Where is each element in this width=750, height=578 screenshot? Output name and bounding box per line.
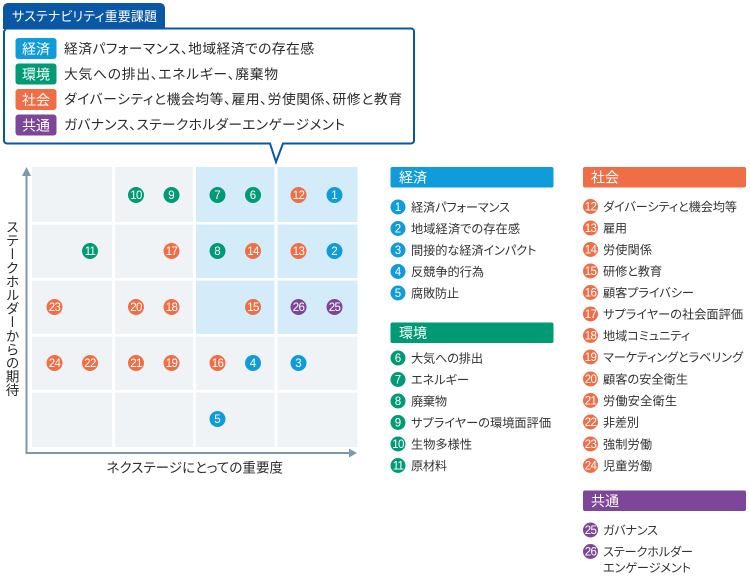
- row: economy: [16, 38, 314, 59]
- legend: society: 顧客プライバシー: [603, 286, 694, 300]
- legend: common: ステークホルダー: [603, 544, 693, 559]
- legend: common: エンゲージメント: [603, 561, 691, 575]
- matrix markers: 15: [247, 302, 259, 314]
- matrix markers: 8: [214, 246, 221, 258]
- heading tab: [3, 3, 165, 29]
- legend: common: [583, 490, 746, 575]
- legend: environment: 原材料: [411, 459, 447, 473]
- legend: society: 21: [585, 396, 596, 408]
- legend: environment: 廃棄物: [411, 394, 447, 408]
- legend: common: 共通: [591, 493, 619, 509]
- matrix markers: 1: [331, 190, 338, 202]
- legend: society: サプライヤーの社会面評価: [603, 306, 743, 322]
- matrix markers: 12: [293, 190, 304, 202]
- panel: sustainability key issues callout: [3, 3, 414, 162]
- legend: society: 19: [585, 352, 596, 364]
- matrix markers: 4: [250, 358, 257, 370]
- row: environment: [16, 64, 278, 84]
- row: society: ダイバーシティと機会均等、雇用、労使関係、研修と教育: [64, 91, 402, 107]
- legend: environment: 環境: [399, 325, 427, 341]
- legend: environment: 大気への排出: [411, 350, 483, 366]
- legend: common: ガバナンス: [603, 524, 658, 538]
- legend: society: マーケティングとラベリング: [603, 350, 744, 364]
- legend: environment: 9: [395, 418, 401, 430]
- legend: society: 23: [585, 439, 596, 451]
- x-axis label: ネクステージにとっての重要度: [106, 460, 283, 476]
- legend: environment: サプライヤーの環境面評価: [411, 416, 551, 430]
- materiality matrix chart: [4, 167, 358, 476]
- callout frame with pointer: [4, 28, 414, 162]
- legend: economy: 経済パフォーマンス: [411, 200, 510, 214]
- matrix markers: 22: [84, 358, 96, 370]
- matrix markers: 18: [166, 302, 177, 314]
- legend: environment: エネルギー: [411, 373, 469, 387]
- legend: society: 社会: [591, 170, 619, 186]
- legend: economy: 2: [395, 224, 401, 236]
- matrix markers: 24: [49, 358, 61, 370]
- matrix markers: 10: [130, 190, 142, 202]
- row: common: 共通: [22, 118, 50, 134]
- matrix markers: 19: [166, 358, 177, 370]
- legend: environment: 10: [392, 439, 404, 451]
- legend: society: 労働安全衛生: [603, 394, 677, 408]
- legend: economy: 間接的な経済インパクト: [411, 242, 536, 258]
- legend: society: 労使関係: [603, 242, 652, 257]
- legend: society: 22: [585, 417, 596, 429]
- legend: society: 15: [585, 266, 596, 278]
- legend: environment: 生物多様性: [411, 438, 472, 452]
- matrix markers: 3: [295, 358, 302, 370]
- legend: society: 雇用: [603, 222, 627, 236]
- matrix markers: [46, 187, 342, 427]
- legend: society: 非差別: [603, 416, 639, 430]
- matrix markers: 26: [293, 302, 304, 314]
- legend: society: 24: [585, 460, 597, 472]
- y-axis label: ステークホルダーからの期待: [4, 220, 19, 397]
- row: economy: 経済: [22, 41, 50, 57]
- legend: environment: [390, 322, 554, 473]
- row: society: [16, 89, 402, 110]
- legend: economy: 腐敗防止: [411, 286, 459, 300]
- legend: economy: 4: [395, 266, 402, 278]
- matrix markers: 11: [85, 246, 96, 258]
- legend: economy: [390, 167, 554, 300]
- row: environment: 大気への排出、エネルギー、廃棄物: [64, 67, 278, 82]
- legend: society: 13: [585, 223, 596, 235]
- legend: society: 18: [585, 330, 596, 342]
- legend: society: 12: [585, 202, 596, 214]
- legend: economy: 地域経済での存在感: [411, 221, 520, 236]
- legend: society: ダイバーシティと機会均等: [603, 199, 737, 214]
- legend: society: 地域コミュニティ: [603, 329, 690, 343]
- axes with arrows: [22, 167, 357, 458]
- legend: society: 16: [585, 288, 596, 300]
- legend: society: 14: [585, 244, 597, 256]
- row: environment: 環境: [22, 66, 50, 82]
- row: economy: 経済パフォーマンス、地域経済での存在感: [64, 40, 314, 56]
- legend: environment: 7: [395, 374, 401, 386]
- matrix markers: 5: [214, 414, 221, 426]
- legend: environment: 11: [393, 460, 404, 472]
- matrix markers: 14: [247, 246, 260, 258]
- legend: environment: 8: [395, 396, 401, 408]
- legend: common: 26: [585, 546, 596, 558]
- heading tab: サステナビリティ重要課題: [12, 9, 157, 24]
- legend: economy: 3: [395, 245, 401, 257]
- legend: society: 研修と教育: [603, 264, 662, 278]
- matrix markers: 9: [168, 190, 175, 202]
- legend: economy: 反競争的行為: [411, 264, 484, 279]
- matrix markers: 6: [250, 190, 256, 202]
- matrix markers: 20: [130, 302, 142, 314]
- row: common: [16, 114, 345, 136]
- matrix markers: 17: [166, 246, 177, 258]
- legend: economy: 1: [395, 202, 401, 214]
- matrix markers: 13: [293, 246, 304, 258]
- matrix markers: 16: [212, 358, 223, 370]
- matrix markers: 23: [49, 302, 60, 314]
- legend: economy: 経済: [399, 170, 427, 186]
- matrix markers: 7: [214, 190, 221, 202]
- row: society: 社会: [22, 92, 50, 108]
- matrix grid cells: [32, 167, 358, 447]
- matrix markers: 2: [331, 246, 338, 258]
- matrix markers: 21: [130, 358, 142, 370]
- legend: society: 強制労働: [603, 438, 652, 452]
- legend: society: 17: [585, 309, 596, 321]
- legend: society: 児童労働: [603, 459, 652, 473]
- legend: society: 顧客の安全衛生: [603, 372, 688, 386]
- row: common: ガバナンス、ステークホルダーエンゲージメント: [64, 118, 345, 132]
- legend: society: 20: [585, 374, 596, 386]
- legend: economy: 5: [395, 288, 401, 300]
- matrix markers: 25: [329, 302, 340, 314]
- legend: society: [583, 167, 746, 473]
- legend: common: 25: [585, 525, 596, 537]
- legend: environment: 6: [395, 353, 401, 365]
